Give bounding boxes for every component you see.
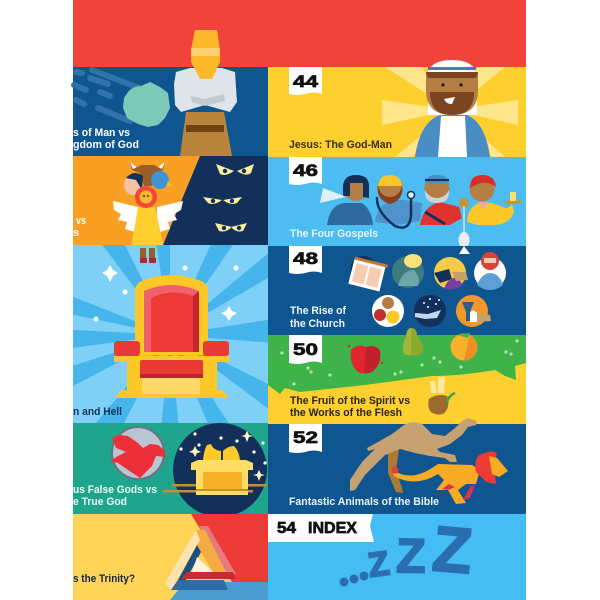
icon: ark of the covenant [163,423,267,517]
icon: elder evangelist [420,175,469,225]
heading: kingdoms of man [73,127,139,151]
heading: fruit of the spirit: the Works of the Flesh [290,407,402,419]
sun rays [382,67,518,157]
badge: page 52 [289,424,322,453]
panel: false gods vs true god [73,423,268,517]
heading: what is the trinity: s the Trinity? [73,573,135,585]
heading: fantastic animals: Fantastic Animals of the Bible [289,496,439,508]
icon: jesus [415,60,490,157]
badge: page 44 [289,67,322,95]
heading: heaven and hell: n and Hell [73,406,122,418]
icon: penrose triangle [165,526,236,590]
panel: jesus the god-man [268,60,526,157]
icon: sleeping zzz: Z [366,544,392,585]
icon: group circle [372,295,404,327]
icon: feather tip [459,246,470,254]
icon: rock motion trails [74,70,150,121]
badge: page 48: 48 [293,249,318,268]
icon: hand with stars circle [414,295,446,327]
icon: preacher circle [392,254,424,288]
icon: scripture scroll [346,253,389,292]
icon: feather [458,206,470,248]
contents page infographic [71,0,526,600]
heading: false gods vs true god: e True God [73,496,127,508]
heading: angels vs demons: s [73,227,79,239]
icon: women circle [434,257,468,290]
badge: page 46: 46 [293,161,318,180]
panel: angels vs demons [73,156,268,248]
sunburst rays [73,245,268,423]
badge: page 46 [289,157,322,185]
banner: index: INDEX [308,520,357,537]
icon: apple [348,345,383,374]
badge: page 50 [289,335,322,364]
heading: false gods vs true god: us False Gods vs [73,484,157,496]
icon: stars [94,265,238,322]
heading: angels vs demons [73,215,86,239]
icon: orange fruit [450,333,478,360]
heading: fruit of the spirit: The Fruit of the Spirit vs [290,395,410,407]
panel: index [268,512,526,600]
icon: throne [114,275,229,398]
heading: jesus the god-man: Jesus: The God-Man [289,139,392,151]
icon: sleeping zzz [340,512,475,587]
heading: angels vs demons: vs [76,215,86,227]
heading: fruit of the spirit [290,395,410,419]
banner: index [268,514,374,542]
badge: page 44: 44 [293,72,319,91]
icon: statue king [174,30,237,156]
icon: megaphone evangelist [320,175,373,225]
heading: the rise of the church: The Rise of [290,305,346,317]
icon: rock [123,82,170,127]
heading: kingdoms of man: gdom of God [73,139,139,151]
icon: sleeping zzz: Z [430,512,475,587]
icon: camel [350,418,477,493]
icon: bread and cup circle [456,295,491,327]
panel: red header band [73,0,526,67]
icon: four-faced creature [113,162,183,248]
icon: pear [403,328,423,356]
icon: green dots [280,339,519,386]
heading: the rise of the church: the Church [290,318,345,330]
panel: what is the trinity [73,514,268,600]
panel: the rise of the church [268,246,526,335]
icon: hydra [110,427,166,479]
panel: heaven and hell [73,245,268,423]
icon: tax collector evangelist [467,175,522,225]
icon: creature feet [140,248,156,263]
heading: the four gospels: The Four Gospels [290,228,378,240]
panel: fruit of the spirit vs works of the flesh [268,328,526,424]
icon: eyes [203,164,254,232]
icon: sleeping zzz: Z [396,530,426,584]
panel: fantastic animals of the bible [268,418,526,514]
icon: rotten fruit [428,377,455,415]
badge: page 52: 52 [293,428,318,447]
badge: page 48 [289,246,322,274]
heading: kingdoms of man: s of Man vs [73,127,130,139]
badge: page 50: 50 [293,340,318,359]
icon: bearded man circle [474,252,506,290]
panel: kingdoms of man [73,30,268,156]
icon: lion [392,452,508,504]
panel: the four gospels [268,157,526,248]
heading: false gods vs true god [73,484,157,508]
icon: doctor evangelist [375,175,422,228]
heading: the rise of the church [290,305,346,330]
banner: index: 54 [277,520,296,537]
